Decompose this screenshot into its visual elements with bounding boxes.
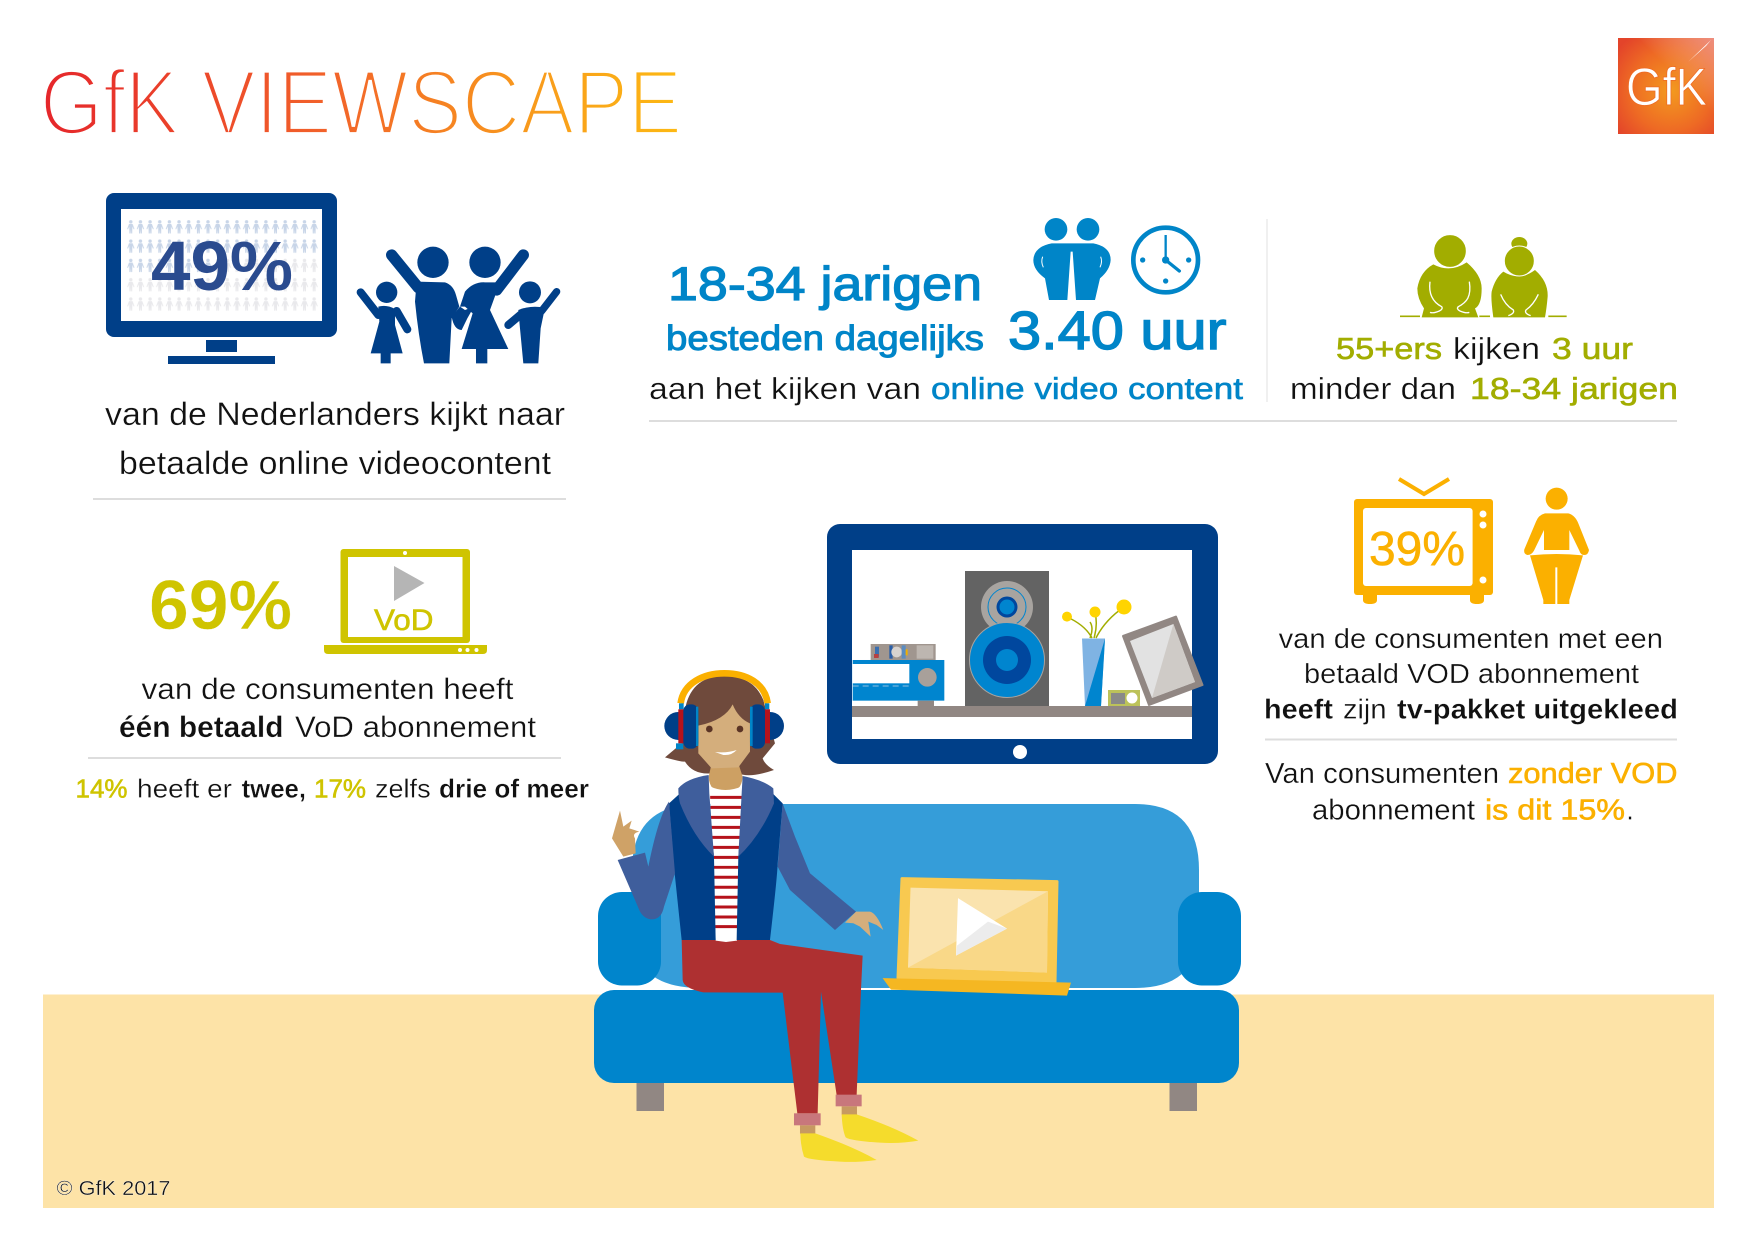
text block: 55+ers: kijken (1453, 331, 1540, 366)
text block: without VOD: Van consumenten (1265, 758, 1499, 790)
text block: tv package: heeft (1264, 694, 1333, 724)
text block: 55+ers: minder dan (1290, 371, 1456, 406)
panel: 18-34 year olds (649, 218, 1243, 406)
icon: family (361, 247, 557, 363)
text block: 55+ers: 18-34 jarigen (1470, 371, 1678, 406)
panel: 69 percent VoD (76, 549, 589, 804)
illustration: woman with headphones (612, 673, 918, 1162)
text block: online video content: aan het kijken van (649, 371, 921, 406)
shelf (852, 706, 1192, 717)
icon: two young people (1033, 218, 1111, 300)
text block: tv package: betaald VOD abonnement (1304, 658, 1639, 689)
icon: older couple (1400, 235, 1567, 317)
text block: without VOD: abonnement (1312, 794, 1475, 826)
sofa back (632, 804, 1199, 988)
icon: VoD laptop (324, 549, 487, 654)
text block: two or more: 14% (76, 774, 128, 804)
icon: monitor with people grid (106, 193, 337, 364)
icon: clock (1133, 228, 1198, 292)
text block: tv package: van de consumenten met een (1279, 623, 1663, 654)
text block: one subscription: één betaald (119, 711, 284, 744)
radio (1108, 690, 1140, 706)
text block: tv package: tv-pakket uitgekleed (1397, 694, 1678, 724)
AV receiver and remote (853, 644, 944, 707)
upper body (612, 673, 883, 942)
text block: 55+ers (1290, 331, 1678, 406)
49% figure: 49% (151, 227, 293, 305)
text block: two or more: zelfs (375, 774, 431, 804)
text block: 55+ers: 3 uur (1552, 331, 1633, 366)
text block: one subscription (119, 673, 537, 744)
illustration: laptop on sofa (883, 879, 1071, 996)
logo: GfK: GfK (1626, 58, 1707, 117)
text block: without VOD: is dit 15% (1485, 794, 1625, 826)
panel: 39 percent (1264, 479, 1678, 826)
text block: without VOD (1265, 758, 1678, 826)
tablet (1123, 617, 1202, 705)
icon: TV with 39%: 39% (1369, 523, 1465, 576)
text block: Nederlanders (105, 396, 565, 481)
logo: GfK (1618, 38, 1714, 134)
vase and flowers (1062, 600, 1132, 706)
text block: Nederlanders: betaalde online videocontent (119, 445, 551, 481)
text block: without VOD: . (1626, 794, 1634, 826)
title: GfK VIEWSCAPE (40, 52, 682, 154)
sofa right foot (1170, 1083, 1197, 1111)
text block: 55+ers: 55+ers (1336, 331, 1442, 366)
text block: two or more: 17% (314, 774, 366, 804)
text block: Nederlanders: van de Nederlanders kijkt naar (105, 396, 565, 432)
panel: 55 plus (1290, 235, 1678, 406)
sofa left arm (598, 892, 661, 986)
illustration: sofa (594, 804, 1241, 1111)
copyright: © GfK 2017 (56, 1178, 170, 1200)
speaker (965, 571, 1049, 706)
sofa right arm (1178, 892, 1241, 986)
panel: 49 percent (105, 193, 565, 481)
text block: two or more: heeft er (137, 774, 232, 804)
icon: VoD laptop: VoD (374, 604, 434, 637)
text block: one subscription: VoD abonnement (295, 711, 537, 744)
heading: 18-34 jarigen: 18-34 jarigen (668, 257, 982, 310)
text block: two or more: twee, (242, 774, 306, 804)
text block: online video content (649, 371, 1243, 406)
sofa left foot (636, 1083, 664, 1111)
figure: 3.40 uur: 3.40 uur (1008, 301, 1227, 361)
text block: tv package (1264, 623, 1678, 724)
icon: TV with 39% (1354, 479, 1493, 604)
text block: two or more (76, 774, 589, 804)
text block: online video content: online video content (931, 371, 1243, 406)
text block: two or more: drie of meer (439, 774, 589, 804)
69% figure: 69% (149, 566, 292, 644)
text block: one subscription: van de consumenten heeft (142, 673, 514, 706)
sofa seat (594, 990, 1239, 1083)
text block: tv package: zijn (1343, 694, 1386, 724)
text block: without VOD: zonder VOD (1508, 758, 1678, 790)
illustration: wall TV (827, 524, 1218, 764)
trousers and shoes (682, 940, 918, 1162)
subheading: besteden dagelijks: besteden dagelijks (666, 319, 984, 358)
icon: undressed person (1524, 488, 1589, 604)
floor (43, 994, 1714, 1208)
